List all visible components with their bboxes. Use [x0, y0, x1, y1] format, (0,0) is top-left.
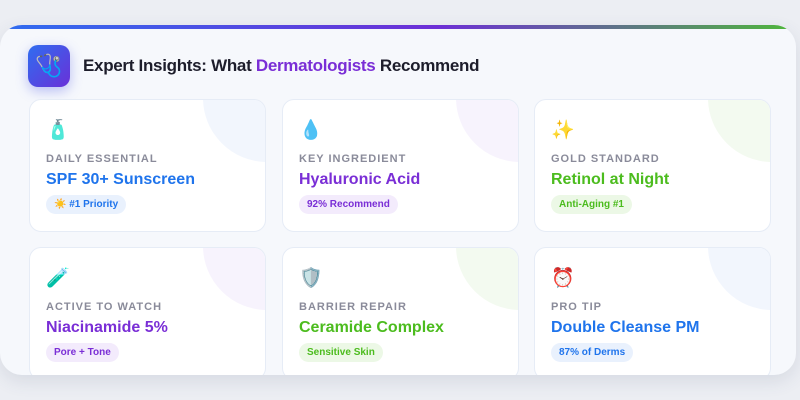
card: ceramide: Ceramide Complex	[299, 319, 444, 336]
pill: 92% Recommend	[307, 199, 390, 210]
icon: shield: 🛡️	[299, 268, 323, 289]
card: sunscreen: SPF 30+ Sunscreen	[46, 171, 195, 188]
card: hyaluronic	[282, 99, 519, 232]
card: retinol	[534, 99, 771, 232]
card: double cleanse: Double Cleanse PM	[551, 319, 699, 336]
card: sunscreen	[29, 99, 266, 232]
pill	[46, 343, 119, 362]
pill: ☀️ #1 Priority	[54, 199, 118, 210]
card: sunscreen: DAILY ESSENTIAL	[46, 153, 158, 165]
icon: alarm clock: ⏰	[551, 268, 575, 289]
card: retinol: GOLD STANDARD	[551, 153, 660, 165]
card: niacinamide: ACTIVE TO WATCH	[46, 301, 162, 313]
card: ceramide	[282, 247, 519, 380]
icon: stethoscope	[28, 45, 70, 87]
pill	[299, 343, 383, 362]
card: double cleanse: PRO TIP	[551, 301, 602, 313]
pill	[551, 195, 632, 214]
pill	[551, 343, 633, 362]
card: retinol: Retinol at Night	[551, 171, 669, 188]
card: niacinamide	[29, 247, 266, 380]
card: hyaluronic: KEY INGREDIENT	[299, 153, 406, 165]
pill	[46, 195, 126, 214]
pill: Sensitive Skin	[307, 347, 375, 358]
card: ceramide: BARRIER REPAIR	[299, 301, 407, 313]
icon: sparkles: ✨	[551, 120, 575, 141]
icon: test tube: 🧪	[46, 268, 70, 289]
icon: drop: 💧	[299, 120, 323, 141]
card: niacinamide: Niacinamide 5%	[46, 319, 168, 336]
pill: Pore + Tone	[54, 347, 111, 358]
card: hyaluronic: Hyaluronic Acid	[299, 171, 420, 188]
card: double cleanse	[534, 247, 771, 380]
pill	[299, 195, 398, 214]
pill: 87% of Derms	[559, 347, 625, 358]
title: Expert Insights: What Dermatologists Recommend	[83, 56, 479, 75]
icon: lotion: 🧴	[46, 120, 70, 141]
pill: Anti-Aging #1	[559, 199, 624, 210]
icon: stethoscope: 🩺	[35, 53, 63, 78]
